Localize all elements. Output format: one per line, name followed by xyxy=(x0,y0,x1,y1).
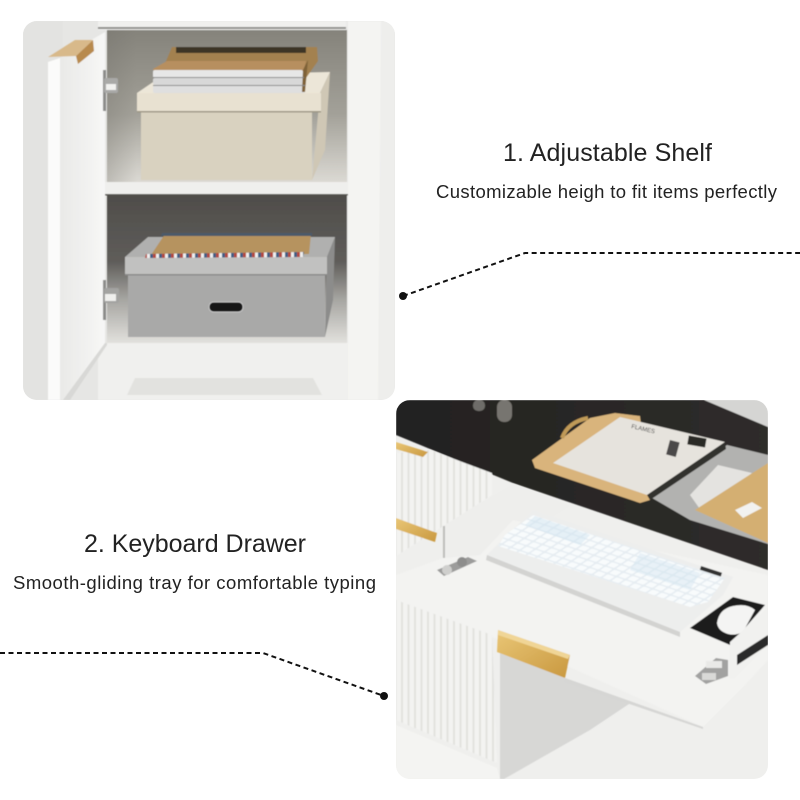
black desktop xyxy=(396,400,768,570)
gold handle upper xyxy=(396,442,428,457)
stack of books xyxy=(153,47,318,93)
decor on desk xyxy=(473,400,768,427)
lower hinge xyxy=(103,280,119,320)
notebook xyxy=(553,417,726,500)
hinge right xyxy=(695,658,728,684)
gray storage box xyxy=(125,233,335,337)
fluted upper drawer xyxy=(396,450,492,556)
gray cabinet opening xyxy=(500,653,632,779)
keyboard xyxy=(486,510,733,637)
front shelf shadow xyxy=(630,702,703,729)
text: adjustable shelf description: Customizable heigh to fit items perfectly xyxy=(436,181,778,202)
text: keyboard drawer description: Smooth-gliding tray for comfortable typing xyxy=(13,572,376,593)
photo: keyboard drawer xyxy=(396,400,768,779)
gray mat xyxy=(647,445,768,544)
drawer left wall xyxy=(512,483,535,492)
right drawer slide xyxy=(729,632,768,666)
white paper sheet xyxy=(690,465,752,512)
photo: cabinet with adjustable shelf xyxy=(23,21,395,400)
upper hinge xyxy=(103,70,118,111)
gold handle lower xyxy=(497,630,570,678)
cabinet interior lower compartment xyxy=(107,195,347,343)
heading: adjustable shelf: 1. Adjustable Shelf xyxy=(503,139,712,167)
top fluted panel xyxy=(98,21,346,30)
mouse xyxy=(717,605,755,635)
tan folder xyxy=(695,463,768,543)
gold handle middle xyxy=(396,518,437,542)
adjustable shelf board xyxy=(105,182,348,195)
notebook: FLAMES xyxy=(631,424,655,435)
envelope on gray box xyxy=(145,233,312,258)
box handle slot xyxy=(209,302,243,312)
fluted lower door xyxy=(402,602,494,761)
dashed leader line: keyboard drawer xyxy=(0,653,388,700)
floor and front strip xyxy=(396,725,500,779)
open door xyxy=(48,32,107,400)
dashed leader line: shelf xyxy=(399,253,800,300)
cream storage box xyxy=(137,72,330,180)
hinge left xyxy=(437,557,477,576)
tan clipboard xyxy=(532,413,650,503)
drawer tray xyxy=(442,558,768,667)
cabinet interior upper compartment xyxy=(107,30,347,183)
mouse pad xyxy=(690,597,765,645)
cabinet plinth with feet xyxy=(98,343,348,400)
heading: keyboard drawer: 2. Keyboard Drawer xyxy=(84,530,306,558)
door gold handle xyxy=(48,40,94,64)
